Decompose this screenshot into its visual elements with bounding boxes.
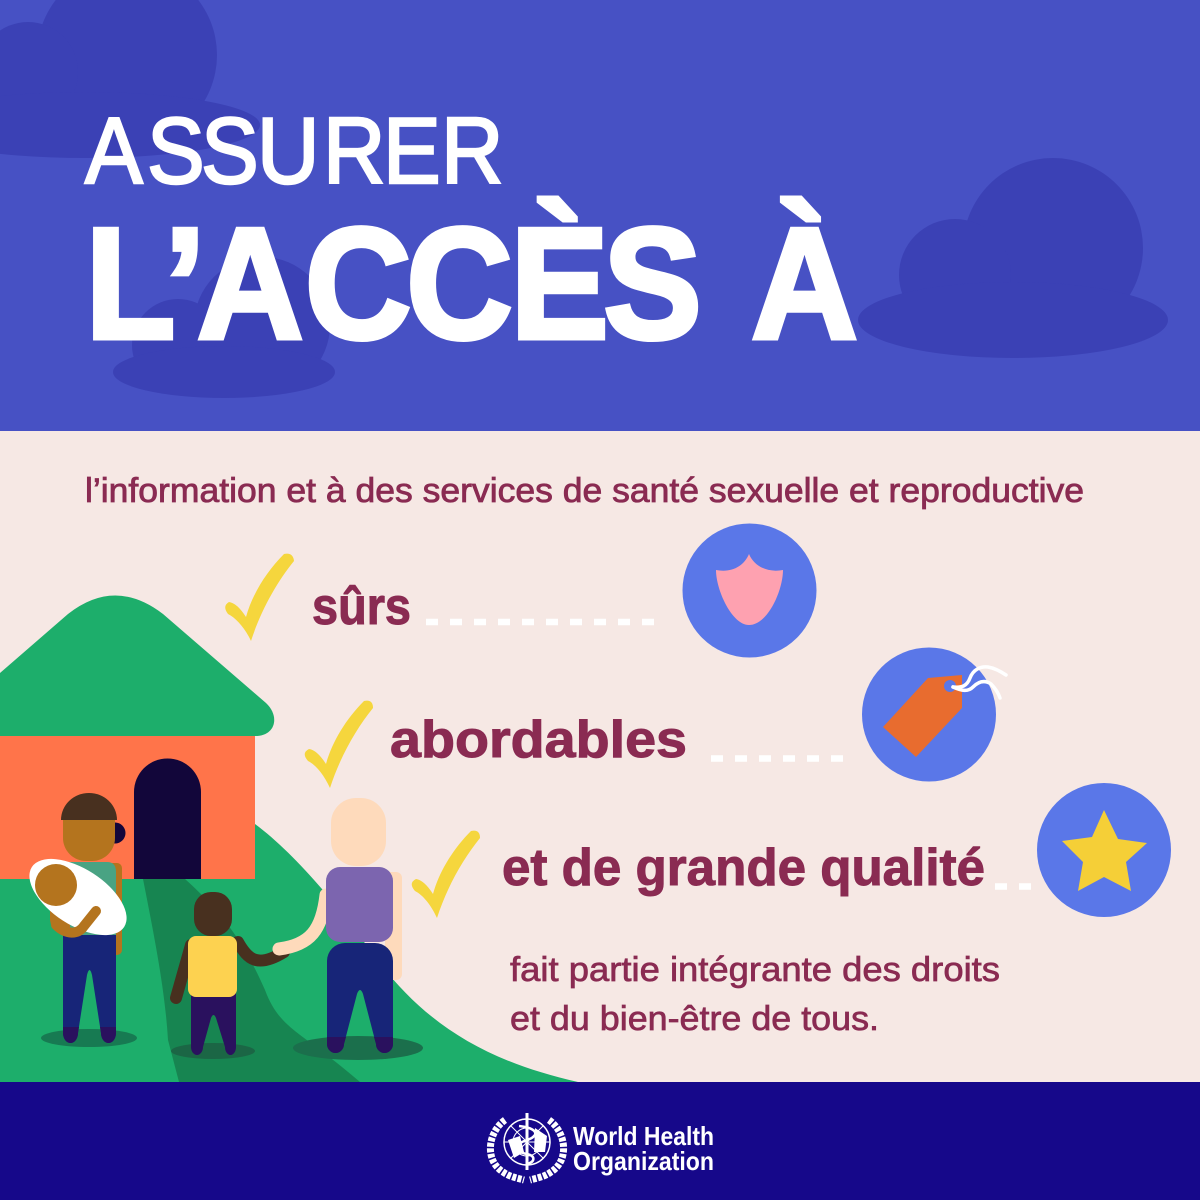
figure: adult with baby [17, 793, 139, 1047]
label: abordables: abordables [390, 711, 687, 769]
footer band [0, 1082, 1200, 1200]
title: ASSURER [85, 99, 503, 204]
label: et de grande qualité: et de grande qualité [502, 839, 985, 897]
wordmark [573, 1121, 714, 1176]
closing text: et du bien-être de tous. [510, 1000, 879, 1038]
check mark: abordables [305, 701, 373, 788]
path [143, 879, 360, 1082]
house wall [0, 736, 255, 879]
closing text [510, 951, 1000, 1038]
door [134, 758, 201, 879]
wordmark: Organization [573, 1146, 714, 1176]
label: sûrs: sûrs [312, 578, 411, 636]
closing text: fait partie intégrante des droits [510, 951, 1000, 989]
dotted line: qualité [995, 883, 1032, 890]
figure: adult holding hand [279, 798, 423, 1060]
wordmark: World Health [573, 1121, 714, 1151]
icon: price tag [862, 648, 1006, 782]
subtitle: l’information et à des services de santé sexuelle et reproductive [85, 472, 1084, 510]
title: L’ACCÈS À [86, 196, 858, 372]
icon: star [1037, 783, 1171, 917]
illustration: house and family [0, 596, 578, 1082]
icon: shield [682, 524, 816, 658]
dotted line: sûrs [426, 619, 654, 625]
check mark: sûrs [225, 554, 294, 641]
dotted line: abordables [711, 755, 844, 762]
emblem [490, 1113, 564, 1180]
check mark: qualité [412, 831, 480, 918]
title [85, 99, 858, 372]
cloud: top left [0, 0, 260, 158]
roof [0, 596, 274, 736]
cloud: centre [113, 257, 335, 398]
cloud: right [858, 158, 1168, 358]
figure: child [171, 892, 284, 1059]
hill [0, 824, 578, 1082]
header band [0, 0, 1200, 431]
WHO logo [490, 1113, 714, 1180]
